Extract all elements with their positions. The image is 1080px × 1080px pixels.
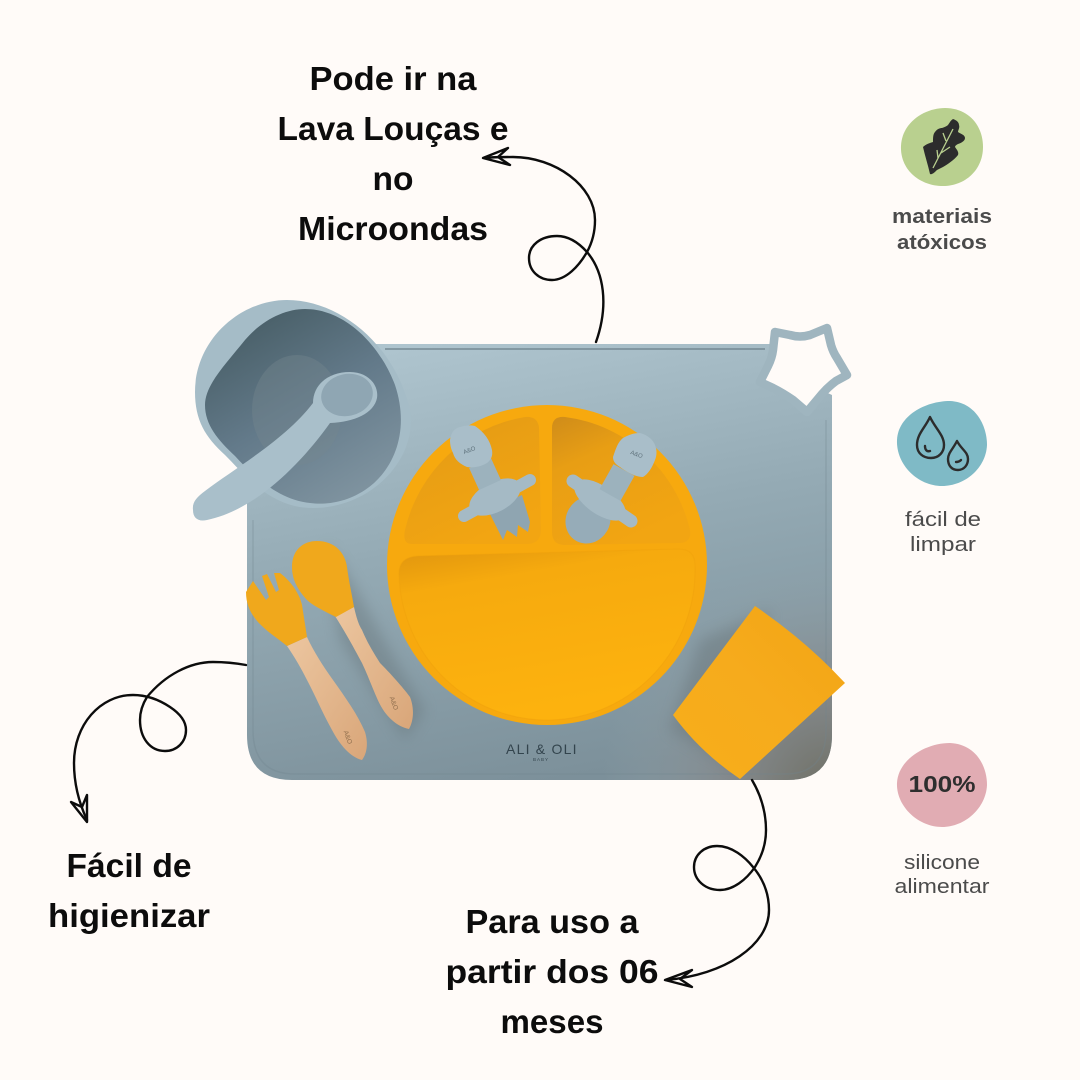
label	[892, 206, 992, 254]
label: atóxicos	[897, 232, 987, 254]
label: materiais	[892, 206, 992, 228]
heading: age: meses	[500, 1003, 604, 1040]
placemat logo: ALI & OLI	[506, 741, 578, 757]
cup	[673, 606, 845, 779]
feature: food-grade silicone	[894, 743, 990, 898]
arrow: left	[71, 662, 246, 822]
heading: dishwasher and microwave: no	[372, 160, 414, 197]
grey baby spoon: A&O	[629, 450, 644, 460]
heading: easy to sanitize: Fácil de	[66, 847, 192, 884]
wooden spoon	[292, 541, 413, 729]
bowl with spoon	[193, 300, 411, 521]
heading: dishwasher and microwave: Pode ir na	[310, 60, 477, 97]
placemat logo: BABY	[533, 757, 549, 762]
heading: dishwasher and microwave: Lava Louças e	[278, 110, 508, 147]
pink blob	[897, 743, 987, 827]
heading: easy to sanitize	[48, 847, 210, 934]
feature: easy to clean	[897, 401, 987, 556]
icon: water drops	[917, 417, 968, 470]
heading: age: partir dos 06	[446, 953, 658, 990]
label	[905, 509, 981, 556]
green blob	[901, 108, 983, 186]
bowl body	[195, 300, 411, 508]
arrow: bottom	[665, 780, 769, 987]
top left compartment	[404, 417, 541, 544]
grey baby spoon	[557, 433, 656, 552]
heading: age: Para uso a	[466, 903, 639, 940]
arrow: top	[483, 148, 603, 342]
wooden fork: A&O	[342, 730, 353, 745]
label	[894, 852, 990, 898]
placemat	[247, 328, 847, 780]
grey baby fork: A&O	[463, 446, 477, 456]
feature: non-toxic materials	[892, 108, 992, 254]
heading: dishwasher and microwave: Microondas	[298, 210, 488, 247]
divided plate	[387, 405, 707, 725]
heading: easy to sanitize: higienizar	[48, 897, 210, 934]
wooden fork	[246, 573, 367, 760]
shadows on placemat	[334, 570, 744, 745]
bottom compartment	[399, 549, 695, 720]
heading: dishwasher and microwave	[278, 60, 508, 247]
top right compartment	[552, 417, 690, 545]
icon: leaf	[923, 119, 965, 174]
placemat star cut-out	[760, 328, 847, 412]
badge text: 100%	[908, 771, 976, 797]
heading: age	[446, 903, 658, 1040]
label: limpar	[910, 534, 976, 556]
label: fácil de	[905, 509, 981, 531]
label: silicone	[904, 852, 980, 874]
wooden spoon: A&O	[388, 696, 399, 711]
bowl spoon	[193, 372, 377, 521]
grey baby fork	[450, 425, 530, 540]
blue blob	[897, 401, 987, 486]
bowl interior	[205, 309, 401, 504]
label: alimentar	[894, 876, 990, 898]
